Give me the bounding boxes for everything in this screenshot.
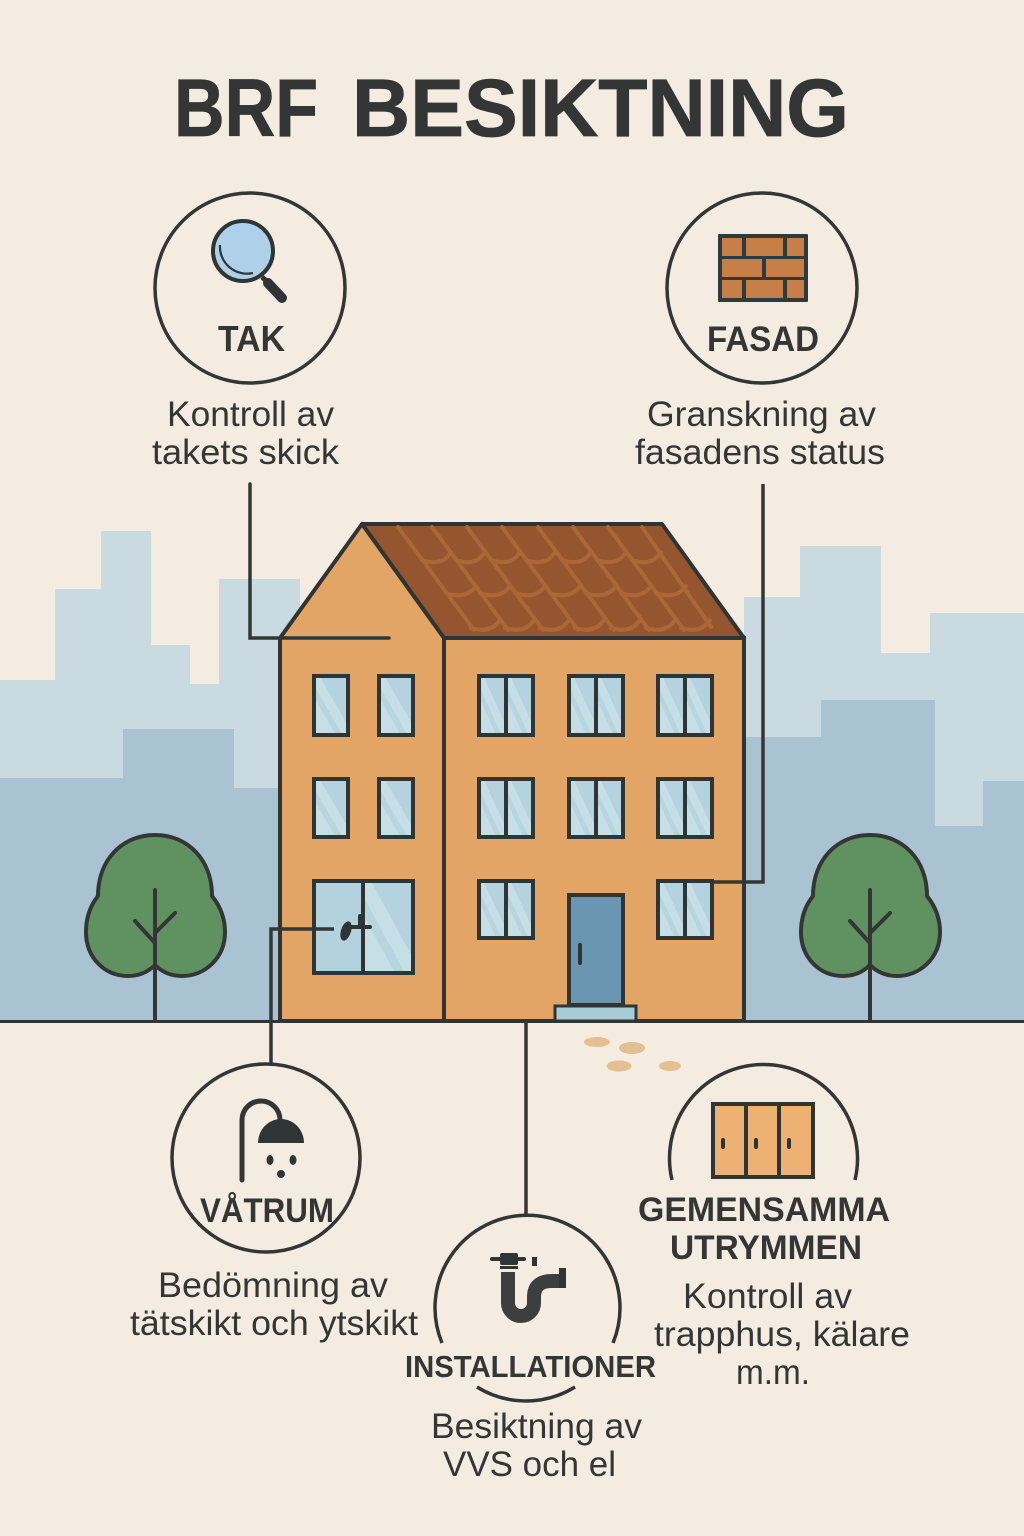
tree left <box>86 835 225 1021</box>
background skyline <box>0 531 1024 1021</box>
building <box>280 524 744 1021</box>
tak description <box>152 394 339 472</box>
door step <box>555 1006 636 1021</box>
installationer heading: INSTALLATIONER <box>405 1349 656 1384</box>
fasad description: Granskning av <box>647 394 876 434</box>
icon: pipe trap <box>490 1253 566 1316</box>
gemensamma description <box>654 1276 910 1392</box>
våtrum description <box>130 1265 418 1343</box>
faucet on window <box>338 916 370 942</box>
fasad description: fasadens status <box>635 432 885 472</box>
gemensamma heading: GEMENSAMMA <box>638 1191 890 1229</box>
installationer description <box>431 1406 642 1484</box>
panel: fasad <box>635 193 885 472</box>
installationer arcs <box>435 1215 620 1401</box>
tree right <box>801 835 940 1021</box>
title: BESIKTNING <box>352 63 849 154</box>
fasad description <box>635 394 885 472</box>
installationer description: Besiktning av <box>431 1406 642 1446</box>
title: BRF <box>174 63 318 154</box>
connector: fasad <box>713 484 763 882</box>
gemensamma arc <box>670 1064 858 1180</box>
tak heading: TAK <box>218 318 285 359</box>
panel: installationer <box>405 1215 656 1484</box>
walls <box>280 524 744 1021</box>
tak description: takets skick <box>152 432 339 472</box>
gemensamma description: trapphus, kälare <box>654 1314 910 1354</box>
icon: shower <box>242 1101 304 1180</box>
stepping stones <box>584 1037 681 1072</box>
våtrum description: Bedömning av <box>158 1265 388 1305</box>
icon: magnifying glass <box>213 221 282 298</box>
våtrum circle <box>172 1064 360 1252</box>
våtrum heading: VÅTRUM <box>200 1192 334 1230</box>
icon: cabinet <box>713 1104 813 1177</box>
windows <box>314 676 712 973</box>
panel: tak <box>152 193 345 472</box>
icon: brick wall <box>718 234 808 302</box>
connector: tak <box>250 484 389 638</box>
connector: våtrum <box>271 929 334 1063</box>
fasad heading: FASAD <box>707 320 819 359</box>
connector: installationer <box>524 1021 528 1216</box>
gemensamma description: m.m. <box>736 1352 810 1392</box>
panel: våtrum <box>130 1064 418 1343</box>
roof <box>362 524 744 638</box>
gemensamma heading <box>638 1191 890 1267</box>
door <box>569 895 623 1005</box>
våtrum description: tätskikt och ytskikt <box>130 1303 418 1343</box>
gemensamma description: Kontroll av <box>683 1276 852 1316</box>
panel: gemensamma utrymmen <box>638 1064 910 1392</box>
installationer description: VVS och el <box>443 1444 616 1484</box>
tak circle <box>155 193 345 383</box>
ground line <box>0 1020 1024 1023</box>
gemensamma heading: UTRYMMEN <box>670 1229 862 1267</box>
fasad circle <box>667 193 857 383</box>
tak description: Kontroll av <box>167 394 334 434</box>
